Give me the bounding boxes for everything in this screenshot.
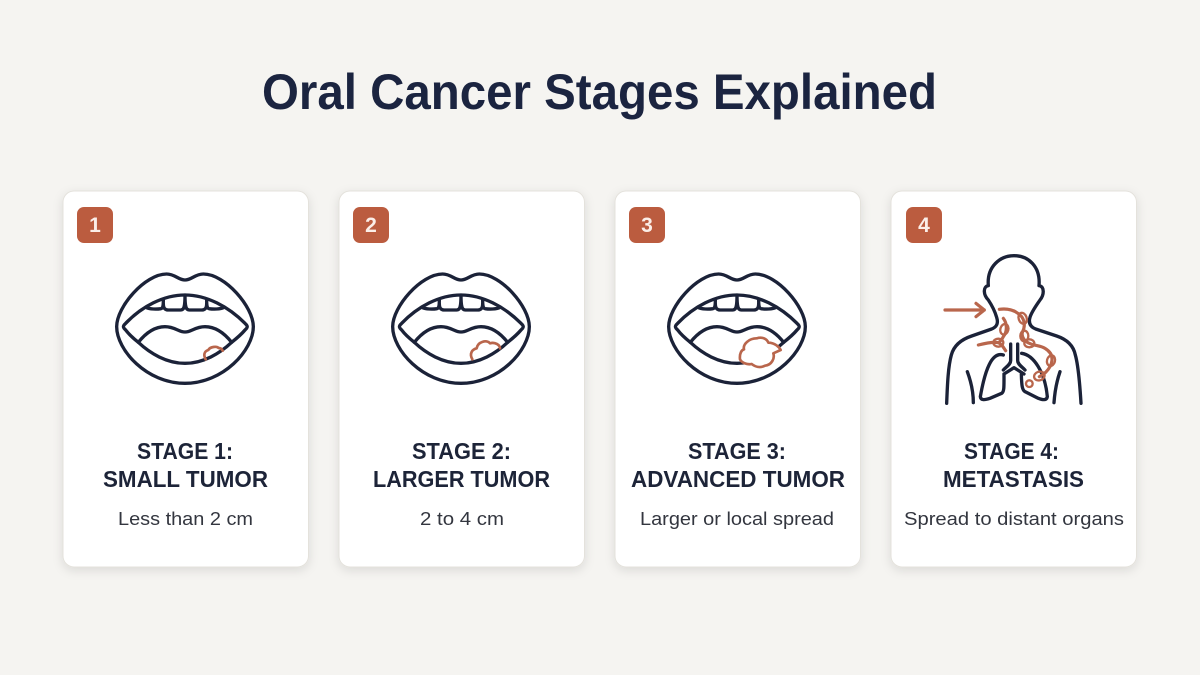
icon: mouth with larger tumor (393, 274, 529, 383)
card background (891, 191, 1136, 567)
lungs and trachea (980, 344, 1047, 400)
icon: mouth with advanced tumor (669, 274, 805, 383)
description: stage 3: Larger or local spread (640, 508, 834, 529)
panel: stage 2 (339, 191, 584, 567)
badge: number 2: 2 (365, 214, 377, 237)
heading: stage 2 line 1: STAGE 2: (412, 438, 511, 464)
arrow (945, 303, 984, 317)
card background (615, 191, 860, 567)
heading: stage 1 line 1: STAGE 1: (137, 438, 233, 464)
panel: stage 4 (891, 191, 1136, 567)
heading: stage 2 line 2: LARGER TUMOR (373, 466, 550, 492)
heading: stage 3 line 2: ADVANCED TUMOR (631, 466, 845, 492)
heading: stage 4 line 2: METASTASIS (943, 466, 1084, 492)
badge: number 3 (629, 207, 665, 243)
heading: stage 4 line 1: STAGE 4: (964, 438, 1059, 464)
description: stage 2: 2 to 4 cm (420, 508, 504, 529)
spreading lymph network (978, 309, 1056, 387)
badge: number 3: 3 (641, 214, 653, 237)
description: stage 1: Less than 2 cm (118, 508, 253, 529)
panel: stage 1 (63, 191, 308, 567)
heading: stage 1 line 2: SMALL TUMOR (103, 466, 268, 492)
badge: number 1 (77, 207, 113, 243)
icon: mouth with small tumor (117, 274, 253, 383)
description: stage 4: Spread to distant organs (904, 508, 1124, 529)
card background (63, 191, 308, 567)
card background (339, 191, 584, 567)
heading: stage 3 line 1: STAGE 3: (688, 438, 786, 464)
panel: stage 3 (615, 191, 860, 567)
badge: number 1: 1 (89, 214, 101, 237)
badge: number 4 (906, 207, 942, 243)
badge: number 2 (353, 207, 389, 243)
body outline (947, 256, 1081, 403)
badge: number 4: 4 (918, 214, 930, 237)
title: Oral Cancer Stages Explained (262, 64, 937, 120)
icon: body with metastasis (945, 256, 1081, 403)
